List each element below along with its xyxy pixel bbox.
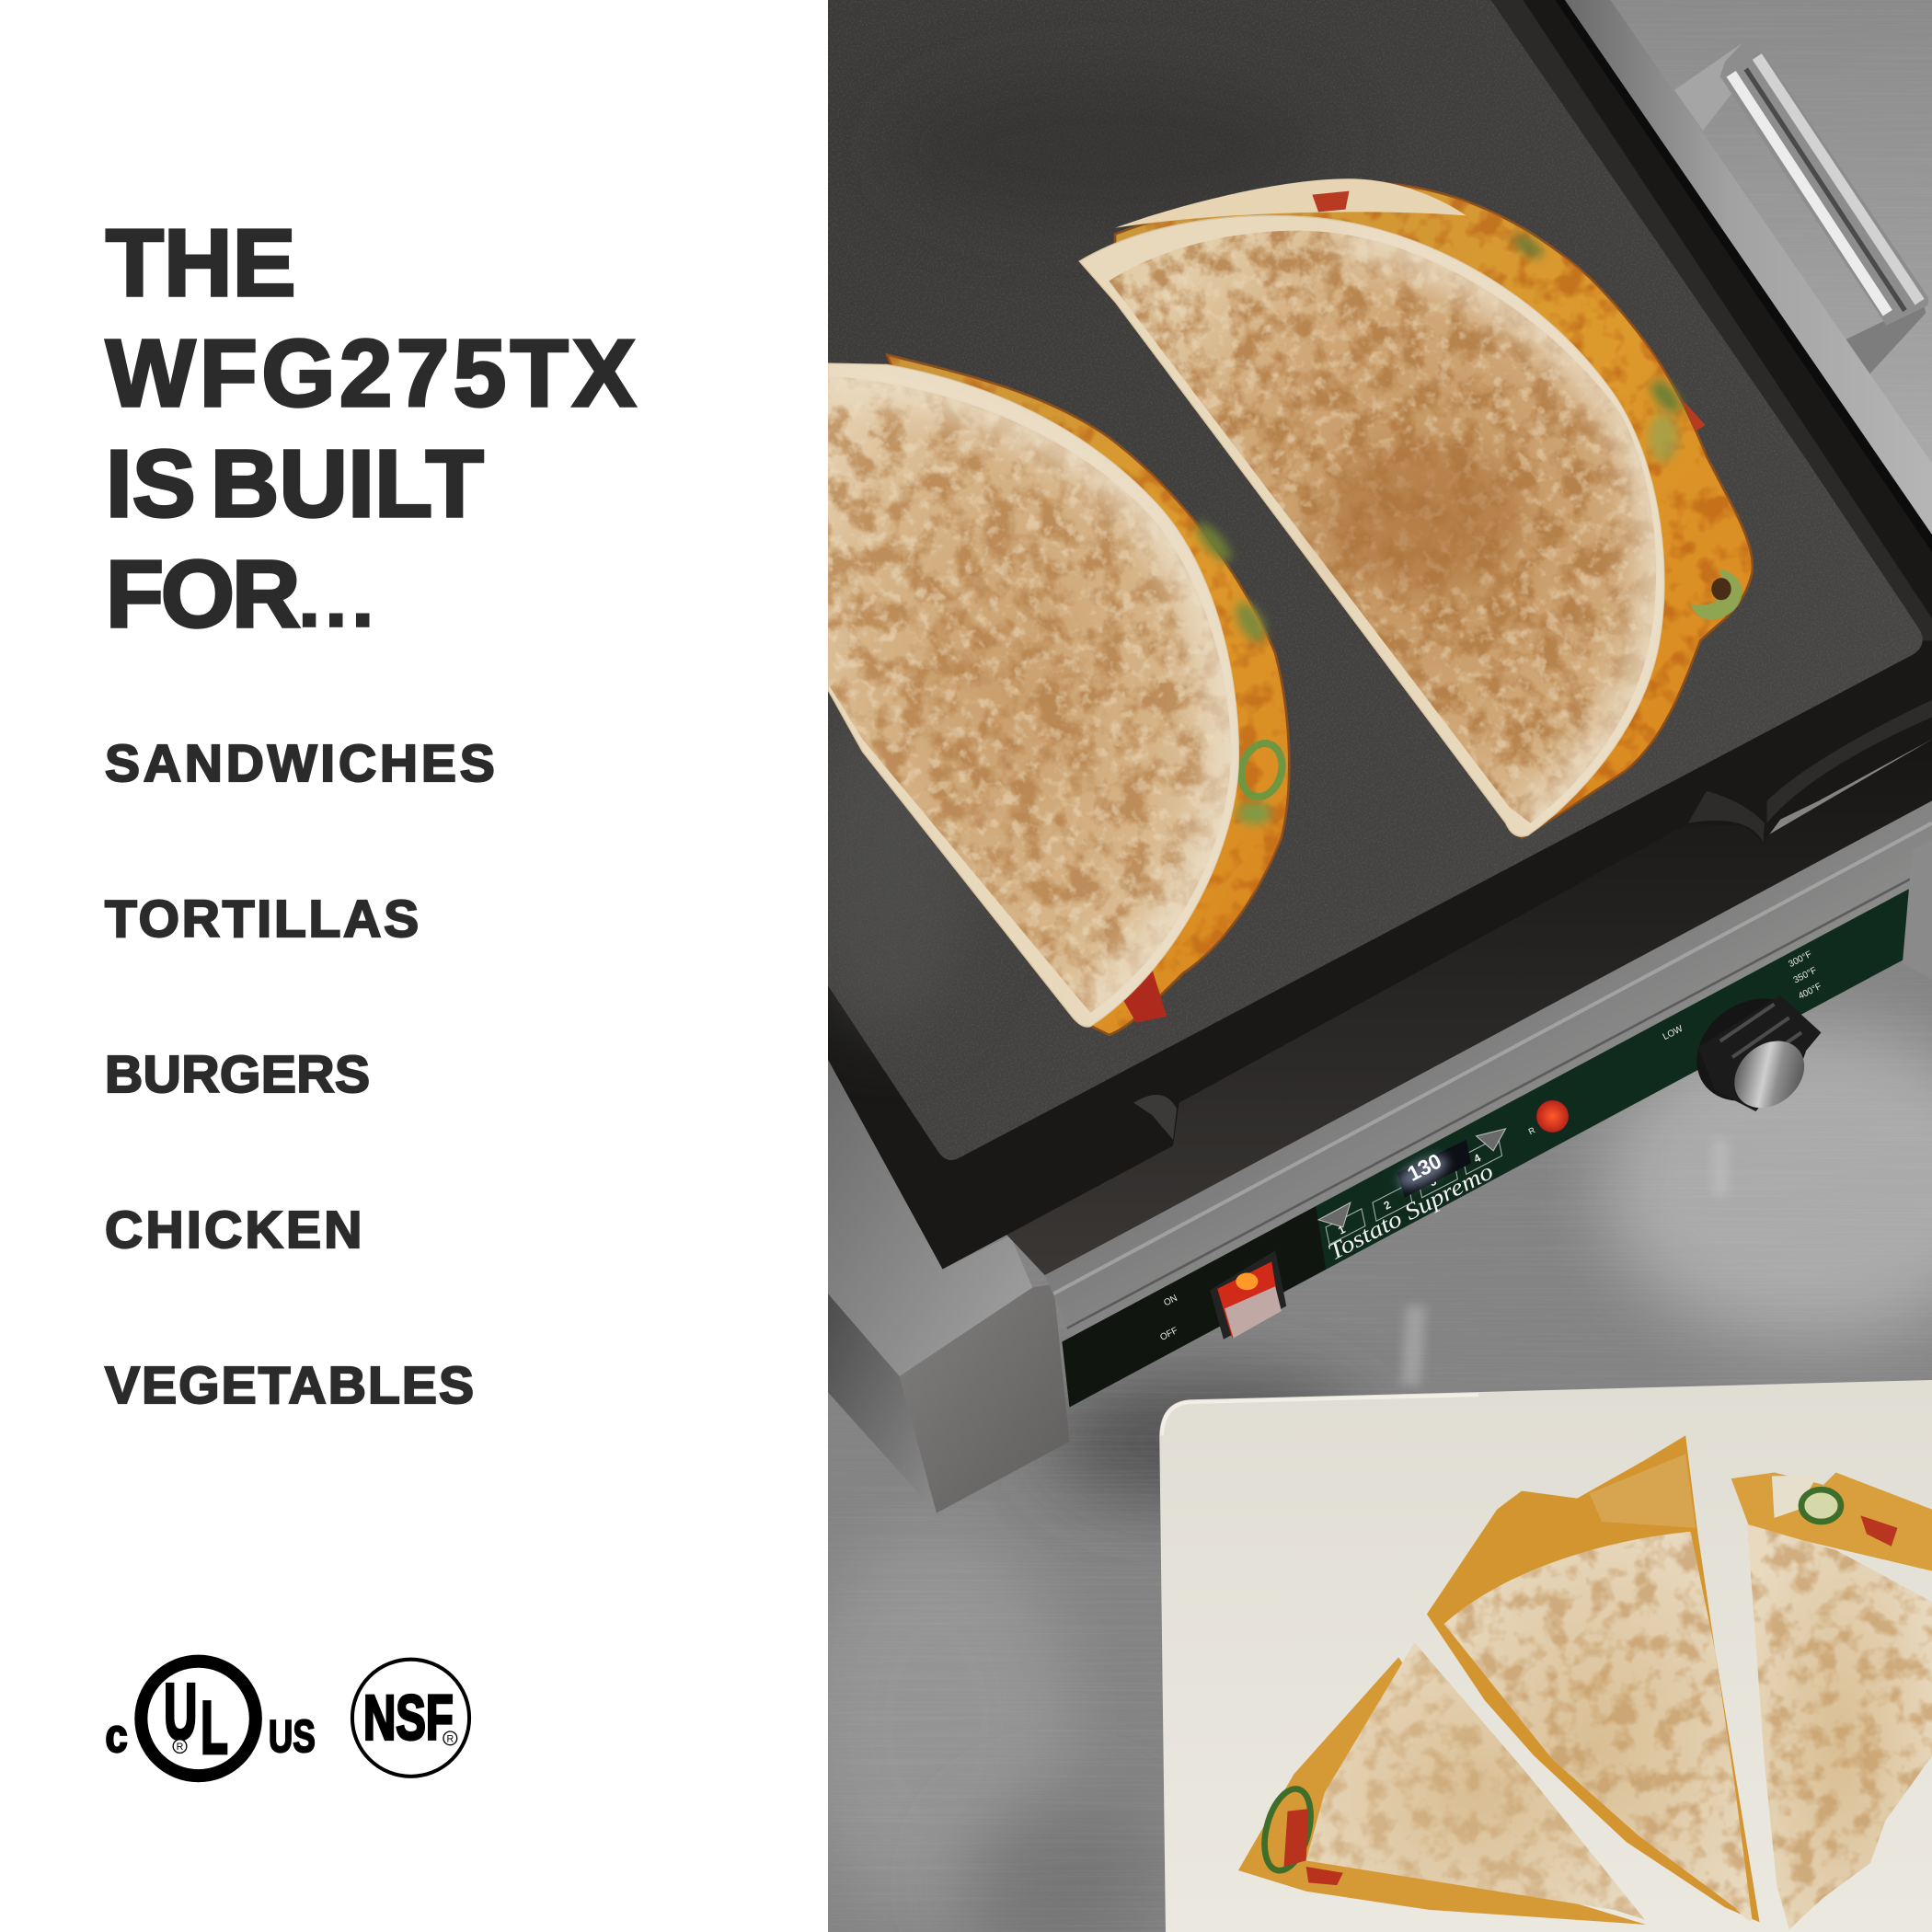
griddle recess shadow (1005, 740, 1932, 1275)
temperature scale: 400°F (1797, 982, 1823, 1002)
icon: NSF mark (352, 1660, 469, 1777)
quesadilla: left griddle (828, 355, 1289, 1035)
top tortilla (1079, 215, 1664, 836)
icon: cULus mark: c (106, 1709, 128, 1762)
griddle handle (1674, 42, 1928, 374)
cheese filling (1115, 182, 1753, 838)
toasted area (1109, 231, 1656, 823)
control panel: 3 (1427, 1175, 1439, 1189)
brand name: Tostato Supremo (1323, 1157, 1498, 1265)
peppers (1119, 518, 1288, 1023)
top tortilla (828, 363, 1238, 1027)
timer display: 130 (1403, 1148, 1445, 1186)
peppers (1312, 191, 1742, 619)
temperature scale: 300°F (1787, 949, 1813, 970)
griddle cast iron body (828, 0, 1932, 1269)
temperature scale: 350°F (1792, 965, 1819, 985)
switch label: ON: ON (1162, 1294, 1179, 1308)
cheese mottling (887, 355, 1289, 1035)
switch label: OFF: OFF (1158, 1326, 1179, 1343)
icon: NSF mark: NSF (363, 1684, 454, 1754)
list item: burgers: BURGERS (105, 1045, 371, 1104)
quesadilla: upper griddle (1079, 178, 1753, 838)
icon: cULus mark: R (177, 1742, 184, 1753)
icon: cULus mark: U (164, 1667, 197, 1755)
icon: jalapeno ring (1801, 1489, 1841, 1522)
slice: right (1731, 1472, 1932, 1929)
title: FOR... (106, 541, 378, 647)
certification logos (106, 1654, 471, 1783)
photo: griddle with quesadillas (828, 0, 1932, 1932)
griddle iron highlight tabs (1133, 700, 1932, 1140)
upper tortilla layer (1115, 178, 1466, 228)
title: WFG275TX (106, 320, 640, 426)
cheese mottling (1115, 182, 1753, 838)
griddle plate (801, 0, 1923, 1160)
icon: cULus mark: L (201, 1686, 228, 1769)
indicator light: R (1527, 1125, 1537, 1136)
counter surface (801, 0, 1932, 1932)
slice: middle (1427, 1435, 1759, 1922)
title: THE (106, 210, 296, 316)
temperature knob (1677, 978, 1827, 1122)
list item: chicken: CHICKEN (105, 1201, 365, 1259)
griddle iron textured strip (1491, 0, 1932, 640)
list item: sandwiches: SANDWICHES (105, 734, 499, 793)
toasted area (828, 375, 1231, 1013)
griddle rim band (1555, 0, 1932, 552)
title: IS BUILT (106, 431, 484, 536)
food list (103, 734, 499, 1415)
title (103, 210, 640, 647)
dial label: LOW: LOW (1662, 1024, 1685, 1042)
griddle left corner block (828, 1047, 1069, 1513)
timer buttons (1318, 1129, 1506, 1245)
plated quesadilla slices (1238, 1435, 1932, 1929)
indicator light (1527, 1100, 1569, 1136)
power rocker switch (1210, 1250, 1286, 1340)
list item: tortillas: TORTILLAS (105, 890, 421, 949)
icon: cULus mark (106, 1662, 316, 1776)
list item: vegetables: VEGETABLES (105, 1356, 476, 1415)
control panel: 4 (1471, 1151, 1483, 1166)
temperature scale (1787, 949, 1823, 1002)
control panel: 2 (1382, 1198, 1393, 1213)
cutting board (1159, 1380, 1932, 1932)
icon: NSF mark: R (446, 1733, 454, 1744)
control panel: 1 (1336, 1223, 1348, 1237)
icon: cULus mark: US (269, 1711, 316, 1762)
cheese filling (887, 355, 1289, 1035)
front control bar (1045, 801, 1932, 1337)
timer display (1394, 1140, 1471, 1198)
control panel (1062, 840, 1932, 1407)
slice: lower left (1238, 1642, 1646, 1925)
